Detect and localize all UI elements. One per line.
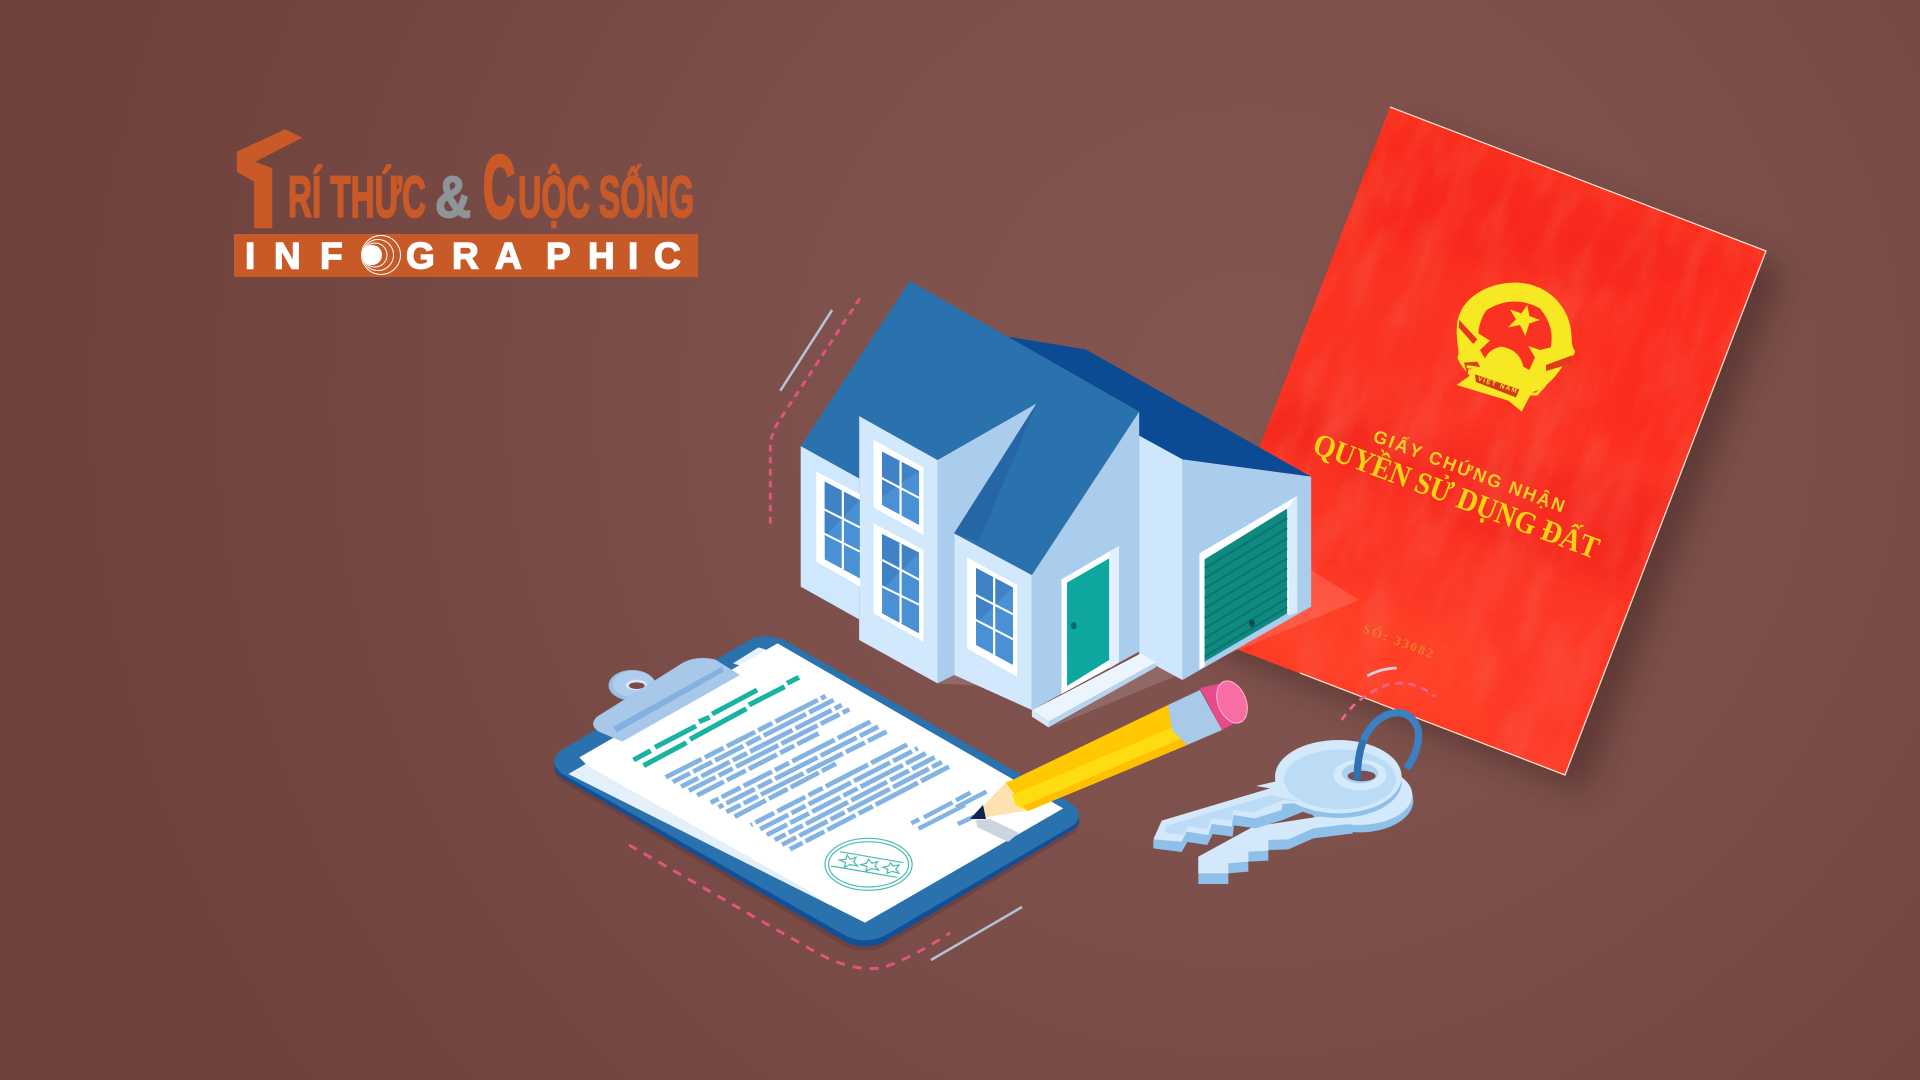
window: lower centre bbox=[874, 523, 923, 642]
garage wall bbox=[1182, 459, 1311, 680]
logo ampersand: & bbox=[435, 165, 471, 230]
accent: pink dashes bbox=[770, 298, 860, 528]
certificate serial number: SỐ: 33082 bbox=[1361, 621, 1435, 661]
logo bar bbox=[234, 234, 698, 277]
garage door bbox=[1199, 496, 1297, 669]
clipboard edge bbox=[554, 640, 1079, 946]
logo: Tri Thuc & Cuoc Song Infographic: T bbox=[254, 176, 272, 241]
pencil wood tip bbox=[970, 780, 1031, 820]
emblem star bbox=[1508, 305, 1540, 336]
logo mark: roof and stem bbox=[237, 129, 302, 228]
signature lines bbox=[911, 792, 986, 829]
window: front bay bbox=[967, 557, 1017, 677]
house cast shadow bbox=[1050, 570, 1359, 728]
pencil body bbox=[1006, 705, 1187, 811]
logo text: Ri Thuc: RÍ THỨC bbox=[288, 165, 426, 230]
house entry shadow bbox=[938, 675, 997, 687]
cover grain bbox=[1276, 108, 1759, 766]
house bbox=[770, 281, 1311, 727]
teal heading lines bbox=[634, 677, 799, 766]
pencil lead bbox=[970, 805, 986, 819]
emblem motto: VIỆT NAM bbox=[1477, 374, 1518, 395]
clipboard shadow bbox=[554, 644, 1079, 951]
certificate paper edge bbox=[1300, 107, 1766, 775]
certificate title small: GIẤY CHỨNG NHẬN bbox=[1371, 425, 1568, 516]
eraser top bbox=[1211, 676, 1253, 728]
upper key bbox=[1153, 740, 1402, 852]
back sheet corner bbox=[733, 647, 777, 670]
pink dashed curve bbox=[629, 845, 950, 969]
pencil bbox=[970, 676, 1253, 842]
main roof bbox=[801, 281, 1139, 575]
connecting wall bbox=[1139, 436, 1182, 680]
window: left wing bbox=[816, 472, 860, 587]
logo circle icon bbox=[362, 236, 400, 274]
accent: light line bbox=[780, 310, 832, 391]
lower sheet band bbox=[569, 765, 826, 903]
clip body bbox=[593, 658, 740, 742]
paper bbox=[569, 643, 1063, 923]
entry step bbox=[1032, 653, 1156, 727]
certificate cover bbox=[1189, 107, 1766, 775]
certificate title large: QUYỀN SỬ DỤNG ĐẤT bbox=[1309, 425, 1605, 566]
clip hole bbox=[626, 680, 647, 690]
land use certificate bbox=[1218, 106, 1788, 796]
clipboard board bbox=[554, 636, 1079, 940]
emblem wreath bbox=[1457, 283, 1575, 397]
eraser bbox=[1200, 681, 1246, 730]
key ring back bbox=[1357, 713, 1419, 773]
logo text: uoc song: UỘC SỐNG bbox=[518, 165, 694, 230]
bar text: GRAPHIC: GRAPHIC bbox=[406, 236, 681, 276]
clip bbox=[593, 658, 740, 742]
clip strip bbox=[613, 667, 724, 732]
window: upper centre bbox=[874, 440, 923, 535]
logo: Tri Thuc & Cuoc Song Infographic bbox=[234, 129, 698, 277]
approval stamp bbox=[825, 838, 912, 890]
clip hook bbox=[609, 670, 656, 701]
light accent line bbox=[931, 907, 1022, 960]
key accent line bbox=[1367, 668, 1397, 676]
pencil shadow bbox=[976, 819, 1019, 842]
pencil ferrule bbox=[1168, 690, 1222, 745]
logo letter C: C bbox=[483, 137, 515, 236]
bar text: INF: INF bbox=[245, 236, 343, 276]
clipboard bbox=[554, 636, 1079, 951]
cover blotches bbox=[1239, 154, 1726, 674]
emblem red centre bbox=[1478, 302, 1552, 370]
centre bay side bbox=[938, 403, 1037, 683]
body text lines bbox=[666, 696, 949, 849]
roof shade bbox=[954, 403, 1037, 542]
certificate shadow bbox=[1209, 125, 1786, 793]
front bay wall bbox=[954, 533, 1032, 710]
national emblem bbox=[1457, 283, 1575, 412]
emblem scroll bbox=[1457, 373, 1533, 412]
emblem ribbon bands bbox=[1459, 320, 1572, 375]
key hole bbox=[1333, 760, 1387, 790]
left wing wall bbox=[801, 446, 859, 619]
key ring front bbox=[1357, 740, 1363, 780]
lower key bbox=[1198, 765, 1413, 884]
gable side wall bbox=[1032, 412, 1139, 710]
centre bay wall bbox=[859, 416, 938, 683]
back roof bbox=[1008, 337, 1311, 477]
key accent dashes bbox=[1342, 683, 1435, 720]
dashed accent lines around clipboard bbox=[629, 845, 1022, 969]
emblem scroll trim bbox=[1467, 367, 1543, 394]
front door bbox=[1061, 546, 1119, 694]
keys bbox=[1153, 668, 1435, 884]
